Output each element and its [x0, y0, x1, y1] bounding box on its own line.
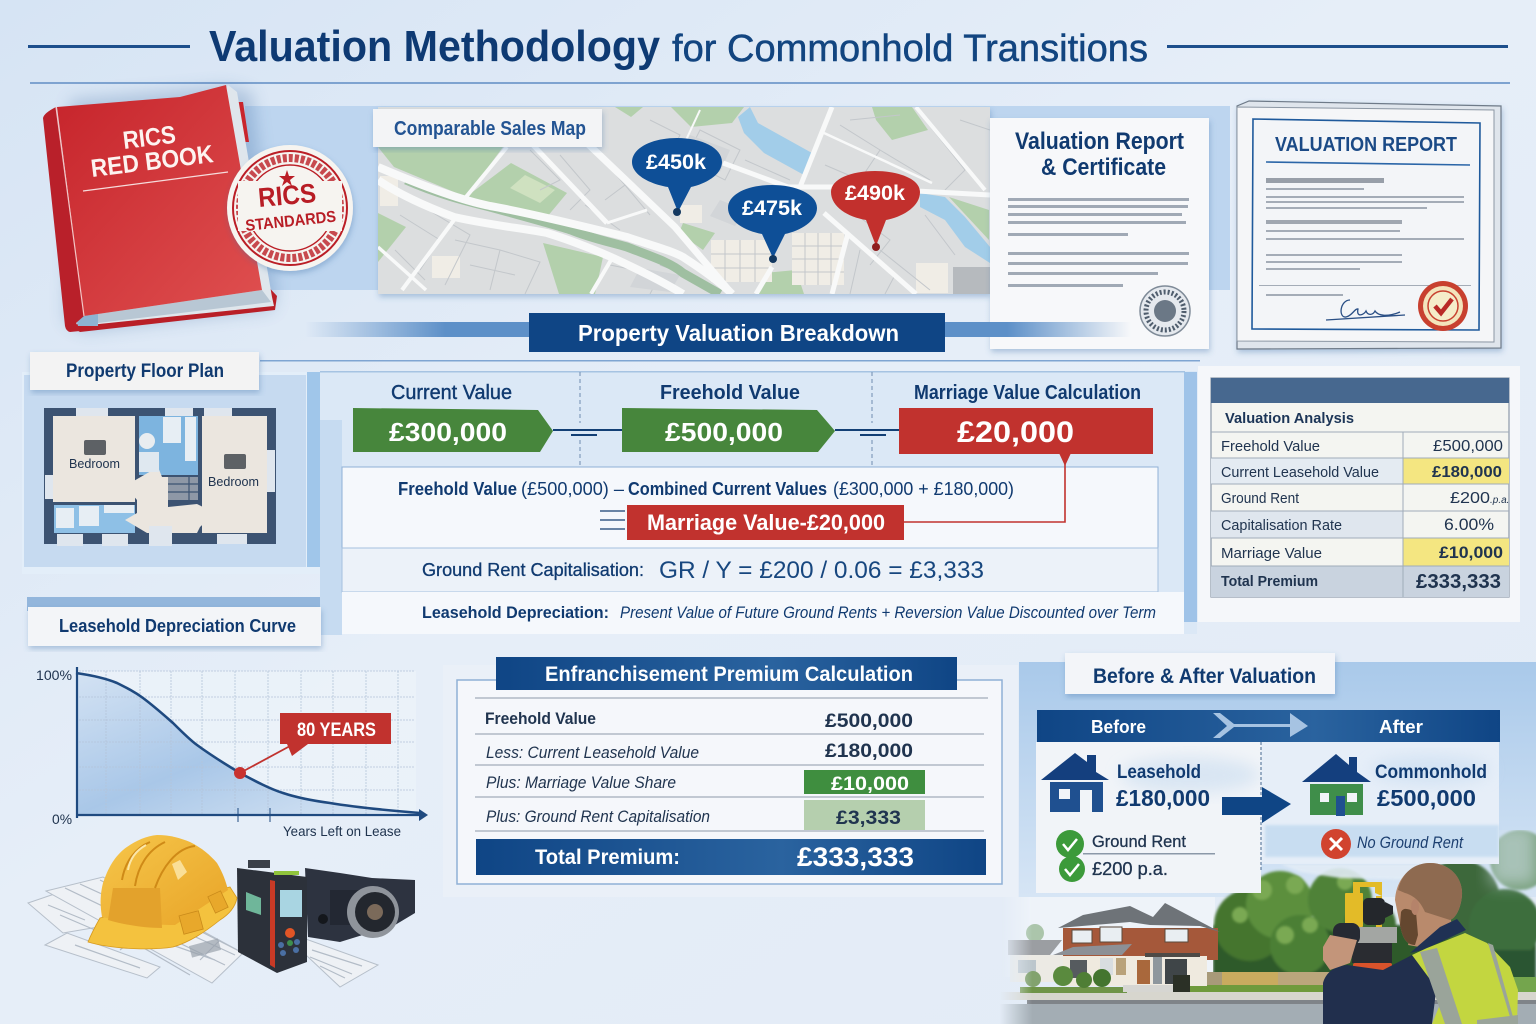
before box: £200 p.a. [1092, 859, 1168, 879]
leasehold depreciation row: Leasehold Depreciation: [422, 603, 609, 622]
before box: Leasehold [1117, 762, 1201, 783]
chart: leasehold depreciation curve: Years Left on Lease [283, 823, 401, 839]
laser meter [237, 860, 307, 973]
panel: enfranchisement premium calculation: £3,333 [836, 808, 901, 829]
table rows: Capitalisation Rate [1221, 517, 1342, 534]
panel: enfranchisement premium calculation: Freehold Value [485, 709, 596, 728]
after box: No Ground Rent [1357, 833, 1464, 852]
map: comparable sales [378, 107, 990, 294]
jacket [1323, 955, 1437, 1024]
parcels [395, 115, 990, 294]
chart: leasehold depreciation curve: 0% [52, 811, 72, 827]
map pin: £475k [728, 185, 817, 263]
ground rent capitalisation row: GR / Y = £200 / 0.06 = £3,333 [659, 557, 984, 584]
table rows: Marriage Value [1221, 545, 1322, 562]
photo: house scene [1000, 825, 1536, 1024]
before box [1036, 742, 1261, 893]
heading: comparable sales map: Comparable Sales Map [394, 118, 586, 140]
heading: comparable sales map [373, 109, 602, 147]
panel: enfranchisement premium calculation: Less: Current Leasehold Value [486, 743, 699, 762]
header bar [496, 657, 957, 690]
icon: RICS standards seal: STANDARDS [245, 209, 337, 235]
section banner: property valuation breakdown: Property Valuation Breakdown [578, 320, 899, 346]
title [28, 22, 1510, 84]
before box: £180,000 [1116, 785, 1210, 811]
column: freehold value [622, 382, 835, 452]
hand [1323, 935, 1357, 970]
icon: RICS red book: RICS [121, 121, 177, 155]
formula box: Freehold Value [398, 479, 517, 499]
section banner: property valuation breakdown [305, 313, 1131, 352]
document: valuation report and certificate [990, 118, 1209, 349]
pavement and road [1000, 992, 1536, 1000]
map base layers [378, 107, 990, 294]
table rows: Total Premium [1221, 573, 1318, 590]
document: valuation report with stamp: VALUATION REPORT [1275, 134, 1457, 156]
ground rent capitalisation row [342, 548, 1158, 592]
panel: valuation analysis table: Valuation Analysis [1225, 410, 1354, 427]
total bar [476, 839, 986, 875]
column: marriage value calculation: £20,000 [957, 416, 1074, 449]
column: current value [353, 382, 553, 452]
panel: valuation analysis table [1198, 366, 1520, 622]
before after header bar: Before [1091, 716, 1146, 737]
formula box: (£300,000 + £180,000) [833, 479, 1014, 499]
column: marriage value calculation: Marriage Value Calculation [914, 382, 1141, 404]
total bar: £333,333 [797, 842, 914, 872]
leasehold depreciation row: Present Value of Future Ground Rents + Reversion Value Discounted over Term [620, 603, 1156, 622]
heading [1065, 653, 1335, 694]
table rows: Current Leasehold Value [1221, 464, 1379, 481]
floor plan drawing: Bedroom [208, 475, 259, 489]
decorative blue strip behind chart heading [27, 597, 320, 611]
icon: commonhold house [1302, 754, 1371, 816]
windows [45, 408, 275, 546]
heading: leasehold depreciation curve: Leasehold Depreciation Curve [59, 615, 296, 636]
column: freehold value: Freehold Value [660, 382, 800, 404]
heading: property floor plan: Property Floor Plan [66, 361, 224, 382]
panel: enfranchisement premium calculation: £10,000 [831, 774, 909, 795]
column: current value: Current Value [391, 382, 512, 404]
title: Valuation Methodology [209, 22, 660, 71]
collar [1410, 919, 1466, 953]
heading: leasehold depreciation curve [28, 607, 321, 646]
table rows: £500,000 [1433, 438, 1503, 455]
chart: leasehold depreciation curve: 100% [36, 667, 72, 683]
table rows [1221, 438, 1509, 593]
after box [1222, 742, 1499, 872]
panel: before and after valuation [1019, 653, 1536, 897]
table rows: £180,000 [1432, 464, 1502, 481]
callout: 80 years: 80 YEARS [297, 720, 376, 741]
document: valuation report with stamp [1237, 101, 1501, 349]
icon: green checks [1056, 830, 1085, 882]
icon: RICS red book: RED BOOK [89, 140, 215, 183]
table rows: .p.a. [1490, 495, 1509, 506]
after box: Commonhold [1375, 762, 1487, 783]
blueprints [28, 877, 378, 987]
connector [553, 430, 622, 435]
table rows: Freehold Value [1221, 438, 1320, 455]
header bar: Enfranchisement Premium Calculation [545, 663, 913, 686]
tree highlights [1232, 874, 1353, 944]
callout: 80 years [234, 713, 391, 779]
camera [305, 868, 415, 942]
floor plan drawing: Bedroom [69, 457, 120, 471]
formula box: (£500,000) – [521, 479, 624, 499]
document: valuation report and certificate: Valuation Report [1015, 128, 1184, 155]
icon: signature [1326, 300, 1405, 320]
instrument [1333, 882, 1397, 998]
arrow: before to after [1222, 787, 1291, 823]
table rows: £200 [1450, 490, 1490, 507]
panel: enfranchisement premium calculation: £500,000 [825, 711, 913, 732]
grass strips [1190, 985, 1323, 992]
chart: leasehold depreciation curve [36, 667, 428, 839]
trees [1213, 825, 1536, 980]
icon: RICS standards seal [227, 145, 353, 271]
before after header bar [1037, 710, 1500, 742]
column: freehold value: £500,000 [665, 417, 783, 447]
sky behind head [1280, 864, 1420, 880]
illustration: hard hat, plans, laser meter and camera [28, 835, 415, 987]
after box: £500,000 [1377, 785, 1476, 811]
panel: enfranchisement premium calculation: Plus: Ground Rent Capitalisation [486, 807, 710, 826]
icon: RICS standards seal: RICS [257, 178, 317, 213]
map pin: £450k: £450k [646, 151, 706, 174]
leasehold depreciation row [342, 592, 1184, 634]
sky wash [1024, 897, 1215, 972]
panel: property floor plan [22, 352, 320, 574]
icon: RICS red book [43, 85, 277, 332]
map pin: £450k [632, 138, 722, 216]
before box: Ground Rent [1092, 832, 1186, 851]
hi-vis vest [1412, 933, 1518, 1024]
column: current value: £300,000 [389, 417, 507, 447]
map pin: £490k [831, 171, 920, 251]
heading: property floor plan [30, 352, 259, 390]
ground rent capitalisation row: Ground Rent Capitalisation: [422, 560, 644, 580]
icon: certificate seal [1140, 286, 1190, 336]
before after header bar: After [1379, 716, 1423, 737]
map pin: £475k: £475k [742, 197, 802, 220]
panel: enfranchisement premium calculation: £180,000 [825, 741, 913, 762]
table rows: Ground Rent [1221, 490, 1300, 507]
heading: Before & After Valuation [1093, 665, 1316, 688]
fence [1207, 972, 1330, 985]
floor plan drawing [44, 408, 276, 546]
table rows: £333,333 [1416, 571, 1501, 593]
formula box: Combined Current Values [628, 479, 827, 499]
icon: leasehold house [1041, 753, 1109, 812]
roads [378, 107, 990, 294]
title: for Commonhold Transitions [672, 28, 1148, 70]
icon: red check stamp [1418, 281, 1468, 331]
hard hat [88, 835, 237, 949]
panel: valuation breakdown [320, 371, 1197, 635]
decorative rule [260, 360, 1200, 362]
document: valuation report and certificate: & Certificate [1041, 154, 1166, 181]
decorative blue panel behind top row [245, 106, 1230, 290]
formula box: Marriage Value-£20,000 [647, 510, 885, 535]
house [1008, 903, 1220, 993]
map pin: £490k: £490k [845, 182, 905, 205]
connector [835, 430, 899, 435]
total bar: Total Premium: [535, 846, 680, 869]
table rows: £10,000 [1439, 543, 1503, 562]
table rows: 6.00% [1444, 515, 1494, 534]
icon: red cross [1321, 829, 1351, 859]
panel: enfranchisement premium calculation [443, 657, 1018, 897]
head [1395, 863, 1462, 948]
column: marriage value calculation [899, 382, 1153, 454]
photo: surveyor with total station [1323, 863, 1518, 1024]
formula box [342, 453, 1158, 548]
panel: enfranchisement premium calculation: Plus: Marriage Value Share [486, 773, 676, 792]
